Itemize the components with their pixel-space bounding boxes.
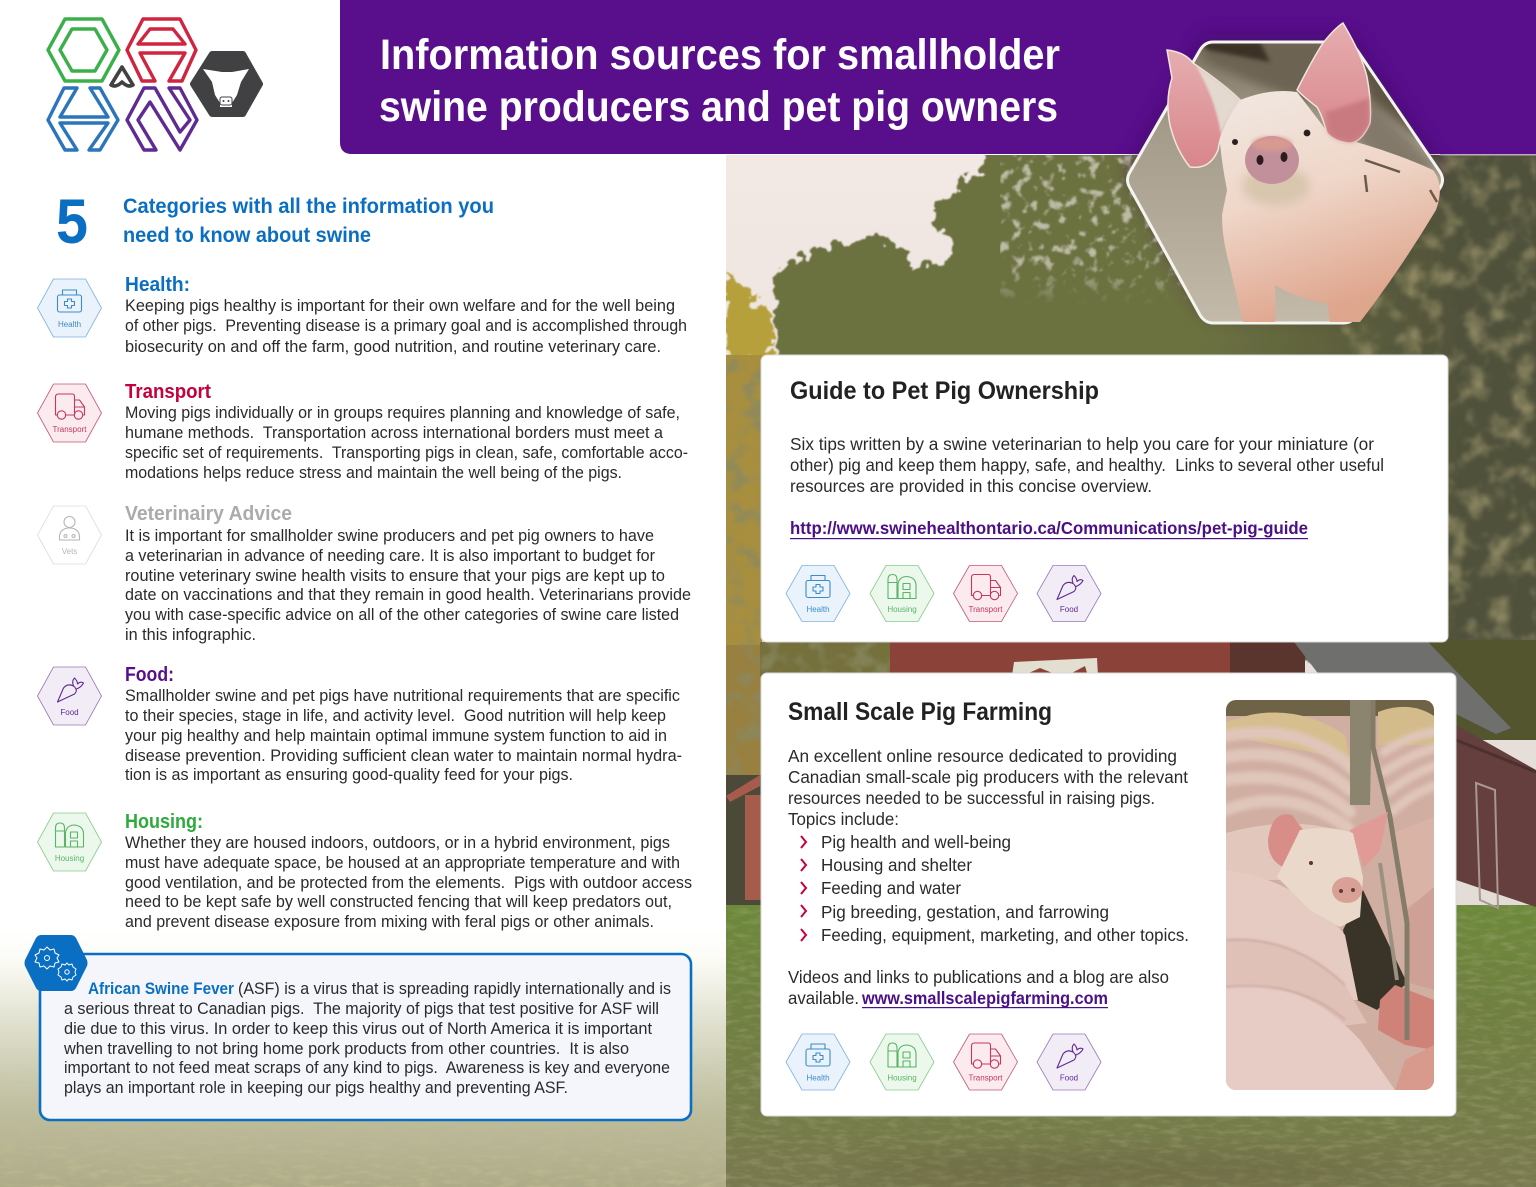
icon: housing: Housing <box>55 854 84 863</box>
section heading: 5 categories: need to know about swine <box>123 224 371 247</box>
closing text and link: available. <box>788 988 859 1008</box>
text block: health: of other pigs. Preventing disease is a primary goal and is accomplished through <box>125 316 687 335</box>
icon row: topics: Health <box>806 1074 830 1082</box>
left panel fog fade <box>0 958 726 1187</box>
text block: food: disease prevention. Providing sufficient clean water to maintain normal hydra- <box>125 746 682 765</box>
text block: housing: need to be kept safe by well constructed fencing that will keep predators out, <box>125 892 672 911</box>
background photo: farm landscape <box>726 130 1536 1187</box>
text block: health: Health: <box>125 274 190 296</box>
callout: African Swine Fever: a serious threat to Canadian pigs. The majority of pigs that test positive for ASF will <box>64 999 659 1018</box>
pig body <box>1167 23 1440 322</box>
text block: veterinary advice: in this infographic. <box>125 625 256 644</box>
icon: transport <box>38 384 102 442</box>
card description: resources needed to be successful in raising pigs. <box>788 788 1155 808</box>
icon: vets: Vets <box>62 547 77 556</box>
icon: health: Health <box>58 320 81 329</box>
section heading: 5 categories <box>56 187 494 257</box>
text block: veterinary advice: Veterinairy Advice <box>125 503 292 525</box>
text block: transport: modations helps reduce stress and maintain the well being of the pigs. <box>125 463 622 482</box>
callout: African Swine Fever <box>24 935 691 1120</box>
callout: African Swine Fever: African Swine Fever <box>88 979 234 998</box>
text block: health: Keeping pigs healthy is important for their own welfare and for the well being <box>125 296 675 315</box>
card description <box>790 434 1384 496</box>
bullet list: topics: Feeding and water <box>821 878 961 898</box>
icon row: topics: Transport <box>969 605 1003 614</box>
text block: veterinary advice: It is important for smallholder swine producers and pet pig owners to have <box>125 526 654 545</box>
icon row: topics <box>786 1034 1101 1090</box>
title: swine producers and pet pig owners <box>379 83 1058 131</box>
bullet list: topics: Feeding, equipment, marketing, and other topics. <box>821 925 1189 945</box>
text block: transport <box>125 381 688 482</box>
icon row: topics: Housing <box>887 1074 917 1082</box>
text block: housing: must have adequate space, be housed at an appropriate temperature and with <box>125 853 680 872</box>
card heading: Small Scale Pig Farming <box>788 698 1052 726</box>
icon: food: Food <box>60 708 79 717</box>
callout: African Swine Fever: when travelling to not bring home pork products from other countries. It is also <box>63 1039 629 1058</box>
panel: Small Scale Pig Farming <box>761 673 1456 1116</box>
bullet list: topics: Pig breeding, gestation, and farrowing <box>821 902 1109 922</box>
panel: Guide to Pet Pig Ownership <box>761 355 1448 642</box>
text block: housing <box>125 811 692 931</box>
text block: transport: humane methods. Transportation across international borders must meet a <box>125 423 664 442</box>
text block: housing: good ventilation, and be protected from the elements. Pigs with outdoor access <box>125 873 692 892</box>
text block: health: biosecurity on and off the farm, good nutrition, and routine veterinary care. <box>125 337 661 356</box>
card description: other) pig and keep them happy, safe, and healthy. Links to several other useful <box>790 455 1384 475</box>
text block: veterinary advice: a veterinarian in advance of needing care. It is also important to budget for <box>125 546 655 565</box>
text block: health <box>125 274 687 356</box>
text block: housing: Whether they are housed indoors, outdoors, or in a hybrid environment, pigs <box>125 833 670 852</box>
text block: veterinary advice: routine veterinary swine health visits to ensure that your pigs are kept up to <box>125 566 665 585</box>
icon: transport: Transport <box>53 425 87 434</box>
header banner <box>340 0 1536 156</box>
pig photo hexagon <box>1120 23 1450 330</box>
icon: gears hexagon <box>24 935 88 991</box>
text block: housing: Housing: <box>125 811 203 833</box>
icon: health <box>38 279 102 337</box>
section heading: 5 categories: 5 <box>56 187 88 257</box>
closing text and link: www.smallscalepigfarming.com <box>861 988 1108 1008</box>
card heading: Guide to Pet Pig Ownership <box>790 377 1099 405</box>
text block: food: to their species, stage in life, and activity level. Good nutrition will help keep <box>125 706 666 725</box>
card description: Canadian small-scale pig producers with the relevant <box>788 767 1188 787</box>
text block: transport: Transport <box>125 381 211 403</box>
text block: food: your pig healthy and help maintain optimal immune system function to aid in <box>125 726 667 745</box>
icon row: topics: Food <box>1060 1074 1078 1082</box>
photo: pigs in a barn <box>1226 700 1434 1090</box>
link: pet pig guide: http://www.swinehealthontario.ca/Communications/pet-pig-guide <box>790 518 1308 538</box>
card description: Topics include: <box>788 809 899 829</box>
closing text and link: Videos and links to publications and a blog are also <box>788 967 1169 987</box>
text block: transport: specific set of requirements. Transporting pigs in clean, safe, comfortable acco- <box>125 443 688 462</box>
text block: housing: and prevent disease exposure from mixing with feral pigs or other animals. <box>125 912 654 931</box>
text block: transport: Moving pigs individually or in groups requires planning and knowledge of safe, <box>125 403 680 422</box>
section heading: 5 categories: Categories with all the information you <box>123 195 494 218</box>
closing text and link <box>788 967 1169 1008</box>
text block: veterinary advice: you with case-specific advice on all of the other categories of swine care listed <box>125 605 679 624</box>
icon: housing <box>38 813 102 871</box>
title <box>379 31 1060 131</box>
callout: African Swine Fever: (ASF) is a virus that is spreading rapidly internationally and is <box>238 979 671 998</box>
icon row: topics: Housing <box>887 605 917 614</box>
card description <box>788 746 1188 829</box>
icon row: topics <box>786 566 1101 622</box>
icon row: topics: Health <box>806 605 830 614</box>
callout: African Swine Fever: important to not feed meat scraps of any kind to pigs. Awareness is key and everyone <box>64 1058 670 1077</box>
bullet list: topics: Pig health and well-being <box>821 832 1011 852</box>
card description: resources are provided in this concise overview. <box>790 476 1152 496</box>
icon row: topics: Transport <box>969 1074 1003 1082</box>
text block: veterinary advice: date on vaccinations and that they remain in good health. Veterinarians provide <box>125 585 691 604</box>
icon: vets <box>38 506 102 564</box>
logo <box>48 19 260 150</box>
icon: food <box>38 667 102 725</box>
callout: African Swine Fever: die due to this virus. In order to keep this virus out of North America it is important <box>64 1019 652 1038</box>
card description: Six tips written by a swine veterinarian to help you care for your miniature (or <box>790 434 1374 454</box>
bullet list: topics: Housing and shelter <box>821 855 972 875</box>
text block: food <box>125 664 682 784</box>
text block: food: tion is as important as ensuring good-quality feed for your pigs. <box>125 765 573 784</box>
text block: food: Food: <box>125 664 174 686</box>
text block: food: Smallholder swine and pet pigs have nutritional requirements that are specific <box>125 686 680 705</box>
callout: African Swine Fever: plays an important role in keeping our pigs healthy and preventing ASF. <box>64 1078 568 1097</box>
card description: An excellent online resource dedicated to providing <box>788 746 1177 766</box>
icon row: topics: Food <box>1060 605 1078 614</box>
title: Information sources for smallholder <box>380 31 1060 79</box>
text block: veterinary advice <box>125 503 691 644</box>
bullet list: topics <box>801 832 1189 945</box>
